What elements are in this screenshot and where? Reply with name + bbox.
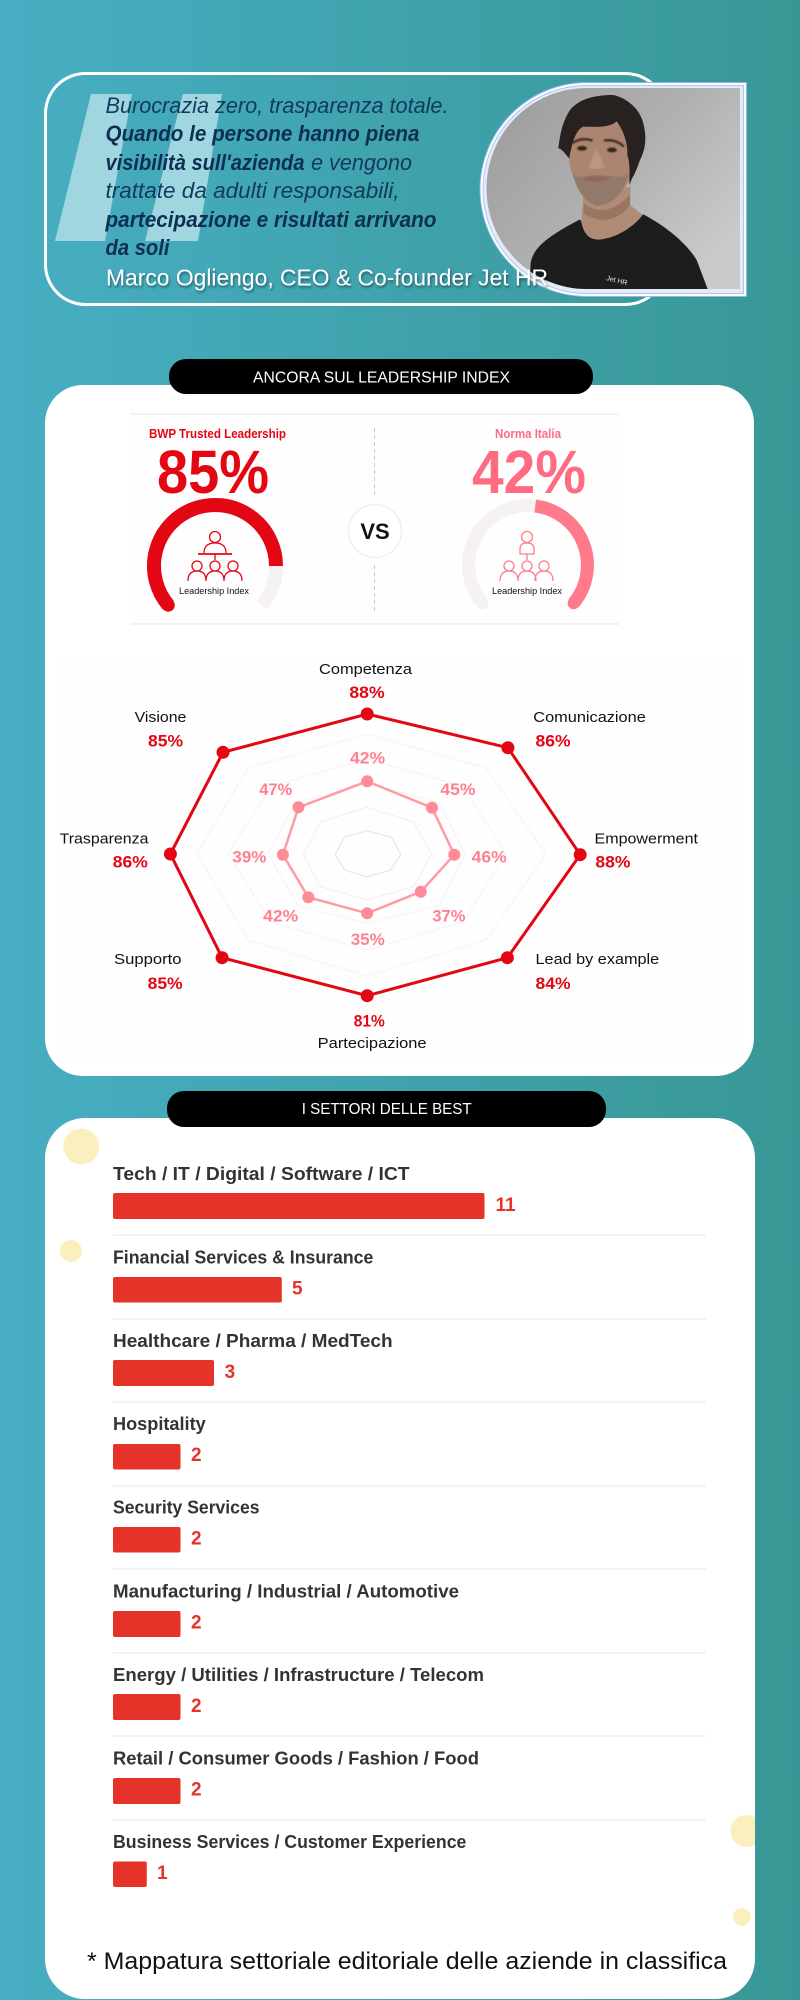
- VS badge: VS: [360, 519, 390, 544]
- row: business services: 1: [157, 1863, 168, 1884]
- quote author: Marco Ogliengo, CEO & Co-founder Jet HR: [106, 264, 548, 290]
- Norma Italia values: 46%: [472, 847, 507, 866]
- row: business services: Business Services / Customer Experience: [113, 1832, 466, 1852]
- heading: i settori delle best: [167, 1091, 606, 1127]
- dimension labels: Comunicazione: [533, 710, 646, 726]
- quote text: [105, 93, 448, 260]
- row: energy: Energy / Utilities / Infrastructure / Telecom: [113, 1665, 484, 1685]
- BWP gauge: BWP Trusted Leadership: [149, 427, 286, 441]
- dimension labels: Competenza: [319, 662, 413, 678]
- stubble: [573, 173, 629, 206]
- row: tech: 11: [496, 1195, 516, 1216]
- Norma Italia values: 37%: [432, 907, 465, 926]
- row: hospitality: Hospitality: [113, 1414, 206, 1434]
- row: manufacturing: 2: [191, 1612, 202, 1634]
- dimension labels: Trasparenza: [60, 832, 150, 848]
- Norma Italia gauge: 42%: [472, 438, 586, 506]
- hair: [558, 95, 645, 185]
- row: retail: [113, 1748, 706, 1821]
- panel: leadership index: [45, 385, 754, 1076]
- row: retail: Retail / Consumer Goods / Fashion / Food: [113, 1748, 479, 1768]
- BWP values: 81%: [354, 1012, 385, 1031]
- row: manufacturing: [113, 1582, 706, 1654]
- series: BWP Trusted Leadership: [164, 708, 587, 1002]
- decorative circles: [60, 1128, 755, 1926]
- heading: ancora sul leadership index: [169, 359, 593, 394]
- BWP values: 85%: [148, 974, 183, 993]
- row: hospitality: [113, 1414, 706, 1487]
- dimension labels: Supporto: [114, 952, 182, 968]
- heading: ancora sul leadership index: ANCORA SUL LEADERSHIP INDEX: [253, 370, 510, 386]
- comparison: BWP vs Norma Italia: [130, 414, 619, 624]
- BWP values: 88%: [595, 853, 630, 872]
- Norma Italia values: [232, 748, 507, 949]
- Norma Italia values: 35%: [351, 930, 385, 949]
- quote text: e vengono: [311, 150, 412, 175]
- neck: [581, 187, 643, 240]
- BWP values: [113, 683, 630, 1031]
- row: energy: [113, 1665, 706, 1737]
- quote text: partecipazione e risultati arrivano: [105, 207, 436, 232]
- row: security: Security Services: [113, 1498, 260, 1518]
- Norma Italia values: 42%: [263, 907, 298, 926]
- BWP values: 85%: [148, 732, 183, 751]
- row: healthcare: 3: [225, 1362, 235, 1383]
- BWP values: 88%: [349, 683, 385, 702]
- heading: i settori delle best: I SETTORI DELLE BEST: [302, 1101, 472, 1118]
- dimension labels: [60, 662, 698, 1052]
- shirt lettering: Jet HR: [606, 275, 628, 287]
- Norma Italia gauge: Leadership Index: [492, 586, 562, 597]
- photo: Marco Ogliengo: [479, 82, 747, 297]
- icon: leader and team: [188, 532, 242, 581]
- dimension labels: Lead by example: [536, 952, 659, 968]
- BWP gauge: [149, 427, 286, 612]
- series: Norma Italia: [277, 775, 460, 919]
- icon: hierarchy team: [500, 532, 553, 581]
- dimension labels: Empowerment: [594, 832, 698, 848]
- quote text: Burocrazia zero, trasparenza totale.: [106, 93, 448, 118]
- quote text: trattate da adulti responsabili,: [106, 178, 400, 203]
- dimension labels: Visione: [135, 710, 186, 726]
- VS badge: [348, 504, 402, 558]
- BWP values: 86%: [113, 853, 148, 872]
- row: manufacturing: Manufacturing / Industrial / Automotive: [113, 1582, 459, 1602]
- row: healthcare: Healthcare / Pharma / MedTech: [113, 1331, 393, 1351]
- facial details: [572, 139, 624, 182]
- dimension labels: Partecipazione: [318, 1036, 427, 1052]
- row: security: 2: [191, 1529, 202, 1550]
- row: hospitality: 2: [191, 1445, 202, 1466]
- row: financial: 5: [292, 1278, 303, 1299]
- quote text: visibilità sull'azienda: [106, 150, 304, 175]
- shirt: [529, 214, 708, 290]
- row: business services: [113, 1832, 466, 1887]
- row: healthcare: [113, 1331, 706, 1403]
- BWP values: 84%: [536, 974, 570, 993]
- Norma Italia values: 42%: [350, 748, 385, 767]
- quote text: Quando le persone hanno piena: [106, 121, 420, 146]
- BWP gauge: Leadership Index: [179, 586, 249, 597]
- row: tech: Tech / IT / Digital / Software / ICT: [113, 1164, 410, 1184]
- Norma Italia values: 47%: [259, 780, 292, 799]
- Norma Italia gauge: [469, 427, 587, 609]
- face: [568, 123, 630, 196]
- BWP values: 86%: [536, 732, 570, 751]
- BWP gauge: 85%: [157, 438, 269, 506]
- row: security: [113, 1498, 706, 1570]
- Norma Italia gauge: Norma Italia: [495, 427, 562, 441]
- row: retail: 2: [191, 1780, 202, 1800]
- Norma Italia values: 39%: [232, 847, 266, 866]
- panel: settori: [45, 1118, 755, 1999]
- row: energy: 2: [191, 1696, 202, 1717]
- row: financial: Financial Services & Insurance: [113, 1247, 373, 1267]
- panel: quote: [46, 74, 747, 304]
- row: tech: [113, 1164, 706, 1236]
- icon: quotation marks: [55, 94, 222, 241]
- row: financial: [113, 1247, 706, 1320]
- Norma Italia values: 45%: [440, 780, 475, 799]
- footnote: * Mappatura settoriale editoriale delle aziende in classifica: [87, 1948, 728, 1975]
- radar chart: [58, 658, 742, 1063]
- quote text: da soli: [106, 235, 170, 260]
- bar chart: settori: [113, 1164, 706, 1887]
